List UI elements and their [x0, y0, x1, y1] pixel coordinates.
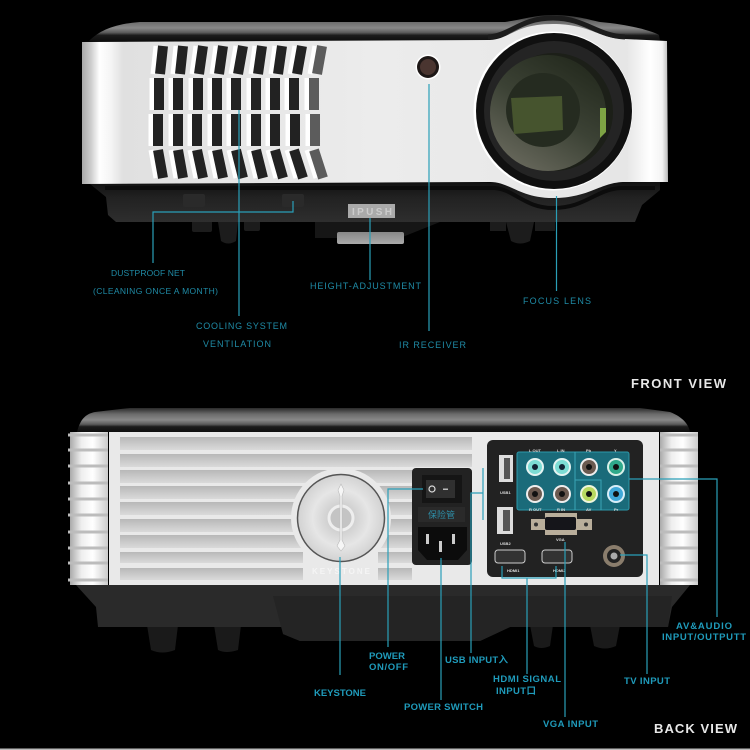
AV connector block: R OUT	[529, 507, 542, 512]
power rocker switch	[422, 475, 462, 503]
label: height adjustment: HEIGHT-ADJUSTMENT	[310, 281, 422, 291]
back callout lines	[340, 468, 717, 717]
AV connector block: R IN	[557, 507, 565, 512]
HDMI ports: HDMI1	[507, 568, 520, 573]
label: dustproof net	[93, 268, 218, 296]
label: USB input: USB INPUT入	[445, 655, 508, 666]
front view projector	[82, 15, 668, 244]
label: cooling system ventilation: VENTILATION	[203, 339, 271, 349]
label: power on/off	[369, 651, 408, 673]
label: HDMI signal input: HDMI SIGNAL	[493, 674, 561, 685]
AV connector block: Pb	[586, 448, 592, 453]
front callout lines	[153, 84, 556, 331]
focus lens	[474, 32, 632, 190]
label: VGA input: VGA INPUT	[543, 719, 598, 730]
label: IR receiver: IR RECEIVER	[399, 340, 466, 350]
USB ports: USB1	[500, 490, 511, 495]
front bottom housing	[90, 182, 660, 222]
IR receiver	[416, 54, 440, 80]
label: cooling system ventilation	[196, 321, 287, 349]
label: AV and audio input/output	[662, 621, 746, 643]
label: TV input: TV INPUT	[624, 676, 670, 687]
fuse label: 保险管	[428, 509, 455, 520]
label: dustproof net: (CLEANING ONCE A MONTH)	[93, 286, 218, 296]
right side fins	[660, 432, 698, 585]
label: AV and audio input/output: INPUT/OUTPUTT	[662, 632, 746, 643]
AV connector block	[517, 448, 629, 512]
AV connector block: Y	[614, 448, 617, 453]
keystone dial	[291, 468, 391, 585]
keystone dial: KEYSTONE	[312, 567, 371, 576]
power module	[412, 468, 472, 565]
back top cover	[77, 408, 690, 432]
label: HDMI signal input	[493, 674, 561, 697]
AV connector block: L OUT	[529, 448, 541, 453]
front height adjustment foot	[337, 232, 404, 244]
power socket	[418, 527, 467, 560]
PUSH label	[348, 204, 395, 218]
label: dustproof net: DUSTPROOF NET	[111, 268, 185, 278]
back vent slots	[120, 437, 472, 580]
label: power on/off: ON/OFF	[369, 662, 408, 673]
back panel	[109, 432, 659, 585]
AV connector block: L IN	[557, 448, 565, 453]
USB ports: USB2	[500, 541, 511, 546]
front feet	[192, 220, 555, 244]
label: focus lens: FOCUS LENS	[523, 296, 591, 306]
label: HDMI signal input: INPUT口	[496, 686, 536, 697]
ventilation grille	[151, 46, 323, 178]
heading: front view: FRONT VIEW	[631, 376, 727, 391]
back bottom housing	[76, 585, 690, 641]
label: power on/off: POWER	[369, 651, 405, 662]
TV port	[603, 545, 625, 567]
VGA port	[531, 513, 592, 542]
label: keystone: KEYSTONE	[314, 688, 366, 699]
label: power switch: POWER SWITCH	[404, 702, 483, 713]
label: cooling system ventilation: COOLING SYSTEM	[196, 321, 287, 331]
IO panel	[487, 440, 643, 577]
HDMI ports	[495, 550, 572, 573]
left side fins	[68, 432, 108, 585]
PUSH label: IPUSH	[352, 207, 392, 218]
AV connector block: AV	[586, 507, 592, 512]
VGA port: VGA	[556, 537, 565, 542]
USB ports	[497, 455, 513, 546]
HDMI ports: HDMI2	[553, 568, 566, 573]
front top cover	[89, 15, 660, 41]
back view projector	[68, 408, 698, 652]
front white body	[82, 24, 668, 198]
label: AV and audio input/output: AV&AUDIO	[676, 621, 732, 632]
AV connector block: Pr	[614, 507, 619, 512]
back feet	[147, 625, 620, 652]
heading: back view: BACK VIEW	[654, 721, 738, 736]
front small buttons	[183, 194, 304, 207]
